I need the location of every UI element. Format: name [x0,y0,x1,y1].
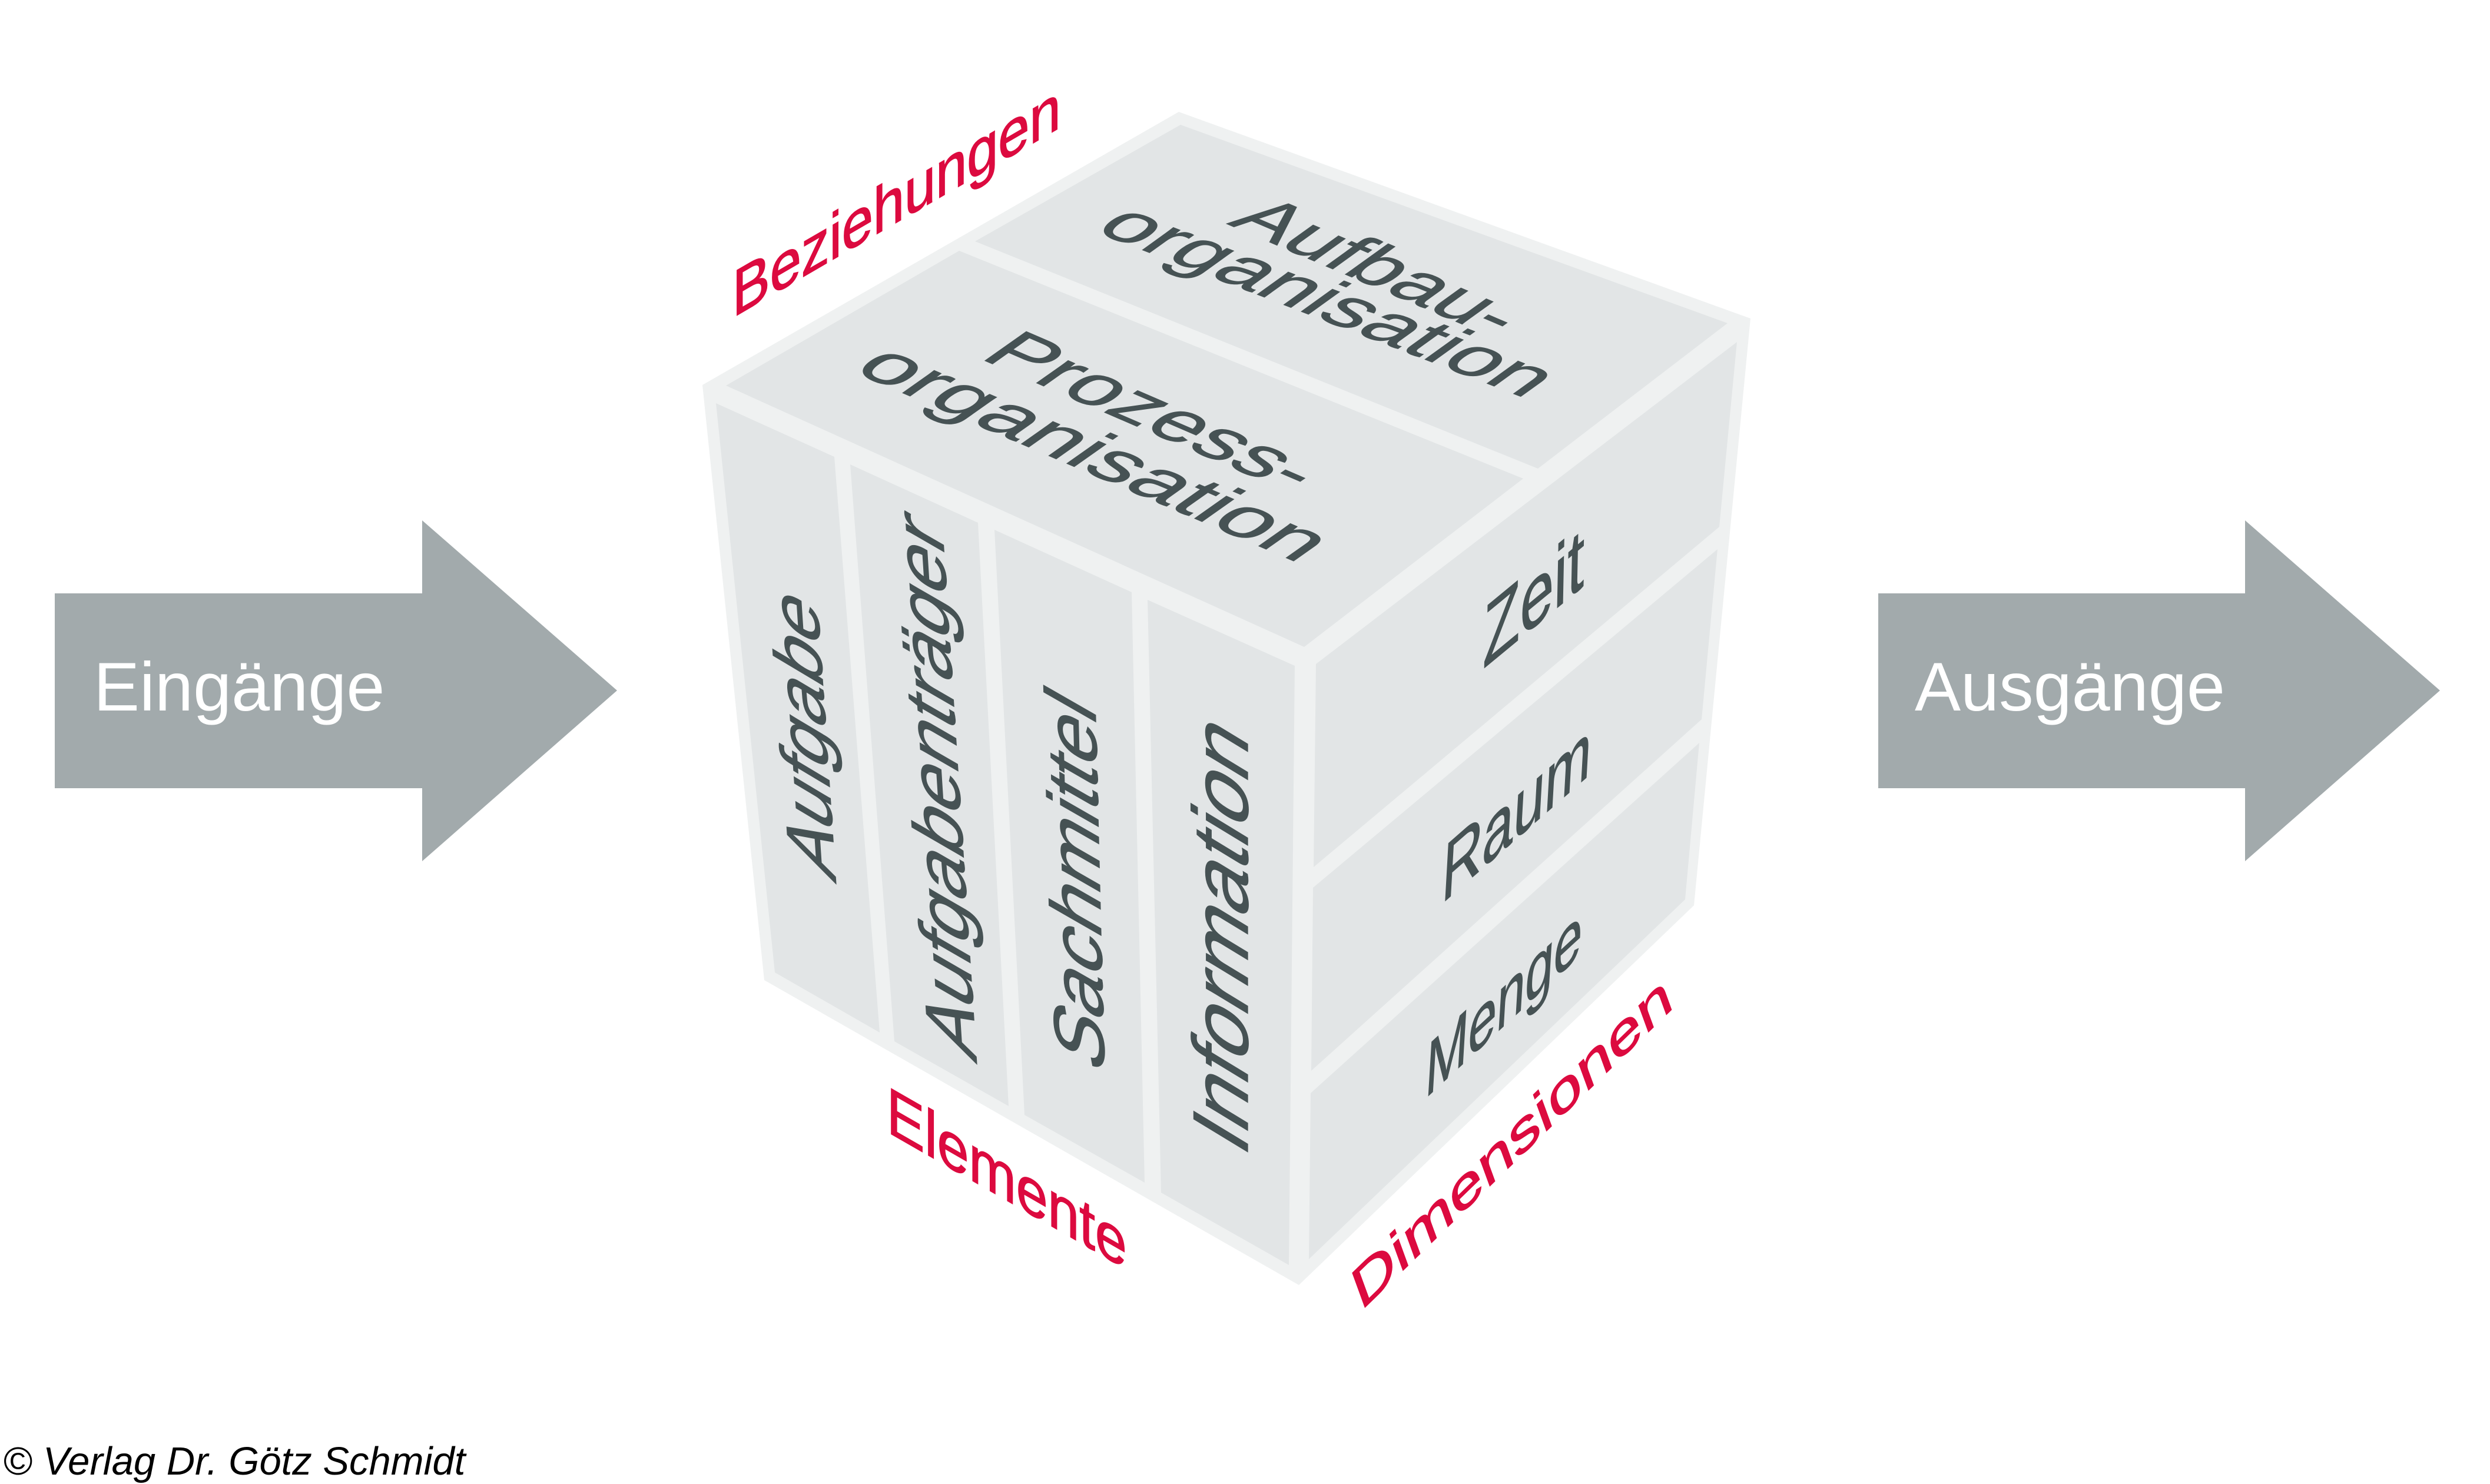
panel: Prozessorganisation: Prozess- [966,320,1344,502]
panel: Zeit [1314,342,1737,867]
panel: Aufgabe: Aufgabe [755,570,851,893]
panel: Aufgabe [716,403,880,1033]
panel: Raum [1311,549,1718,1071]
panel: Raum: Raum [1440,699,1594,923]
label: Dimensionen: Dimensionen [1344,962,1679,1322]
panel: Aufgabenträger [850,464,1009,1106]
panel: Prozessorganisation: organisation [838,333,1353,572]
arrow: Eingänge [55,520,617,861]
panel: Zeit: Zeit [1482,506,1585,689]
label: Beziehungen: Beziehungen [732,69,1061,332]
arrow: Ausgänge: Ausgänge [1915,648,2225,725]
copyright: © Verlag Dr. Götz Schmidt [3,1439,467,1483]
arrow: Eingänge: Eingänge [94,648,384,725]
arrow: Ausgänge [1878,520,2440,861]
panel: Information [1148,600,1295,1265]
panel: Aufbauorganisation: organisation [1080,192,1579,407]
panel: Aufbauorganisation [975,125,1728,469]
panel: Menge: Menge [1423,884,1585,1116]
cube frame [702,112,1750,1285]
panel: Aufgabenträger: Aufgabenträger [878,494,992,1073]
label: Elemente: Elemente [887,1072,1127,1284]
panel: Menge [1309,743,1699,1259]
panel: Information: Information [1177,696,1264,1170]
panel: Aufbauorganisation: Aufbau- [1214,185,1546,346]
panel: Sachmittel [994,530,1145,1183]
panel: Sachmittel: Sachmittel [1031,673,1120,1085]
cube [702,112,1750,1285]
panel: Prozessorganisation [726,251,1523,647]
